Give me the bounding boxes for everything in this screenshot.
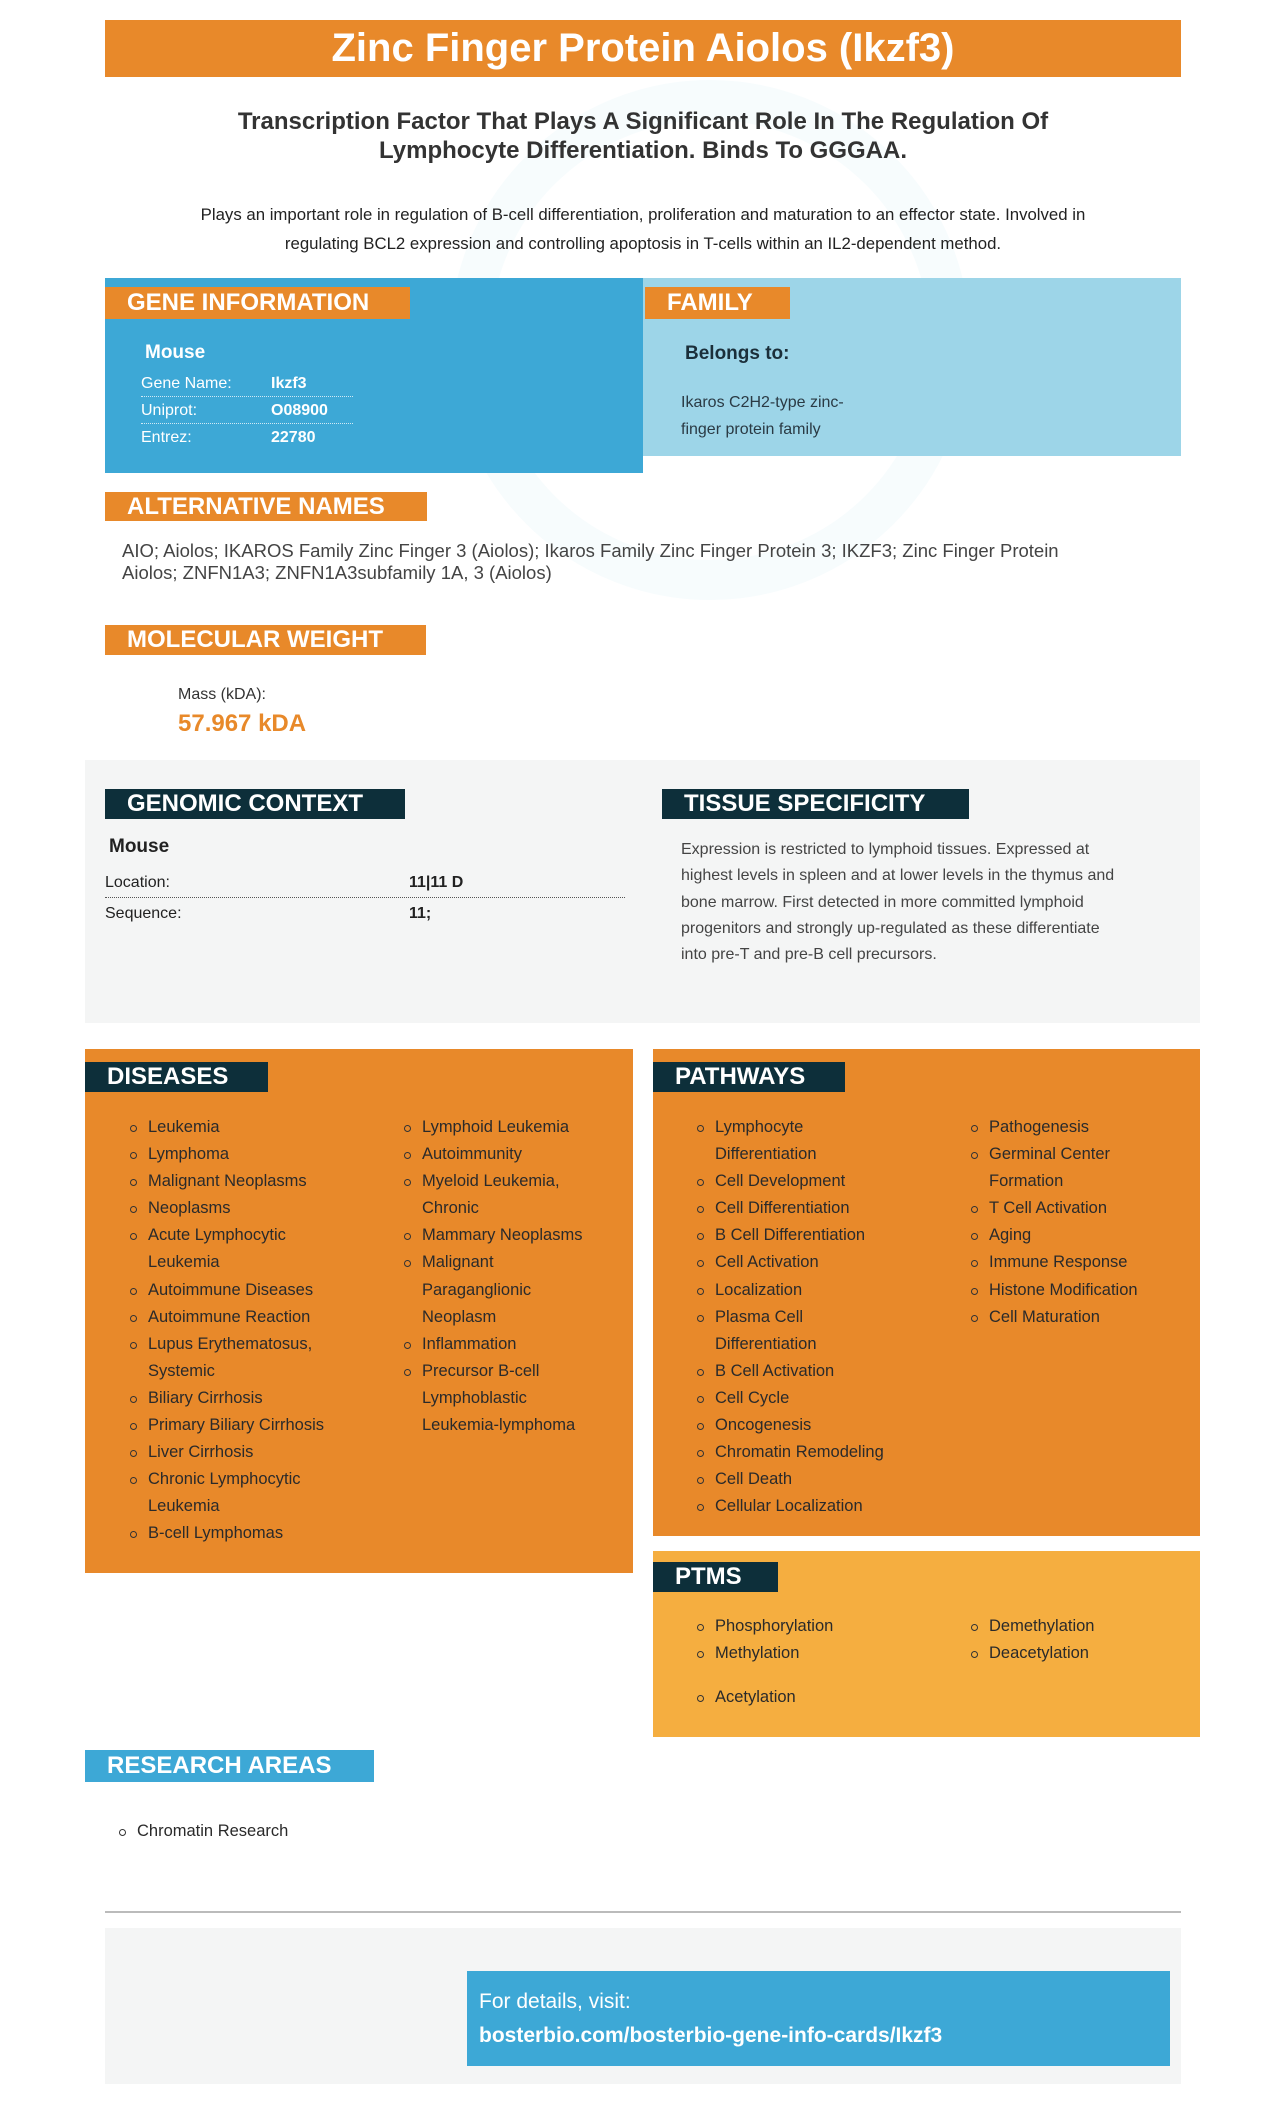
mass — [178, 686, 306, 737]
pathways list col 2 — [971, 1118, 1138, 1326]
genomic table: Mouse — [109, 836, 169, 857]
pathways list col 1: B Cell Differentiation — [715, 1226, 865, 1244]
genomic table: 11; — [409, 905, 431, 922]
panel: gene information — [105, 278, 643, 473]
heading: ptms — [653, 1562, 778, 1592]
pathways list col 1: Chromatin Remodeling — [715, 1443, 884, 1461]
pathways list col 2: Cell Maturation — [989, 1308, 1100, 1326]
pathways list col 1: Cell Differentiation — [715, 1199, 850, 1217]
ptms list col 2: Demethylation — [989, 1617, 1094, 1635]
title bar — [105, 20, 1181, 77]
panel: ptms — [653, 1551, 1200, 1737]
panel: genomic context & tissue — [85, 760, 1200, 1023]
tissue text: highest levels in spleen and at lower levels in the thymus and — [681, 867, 1114, 884]
diseases list col 2: Lymphoid Leukemia — [422, 1118, 569, 1136]
diseases list col 1: Leukemia — [148, 1497, 220, 1515]
diseases list col 2: Leukemia-lymphoma — [422, 1416, 575, 1434]
ptms list col 2 — [971, 1617, 1094, 1662]
heading: ptms: PTMS — [675, 1563, 742, 1590]
alternative names text: AIO; Aiolos; IKAROS Family Zinc Finger 3 (Aiolos); Ikaros Family Zinc Finger Protein 3; IKZF3; Zinc Finger Protein — [122, 540, 1059, 561]
pathways list col 1: Cell Development — [715, 1172, 845, 1190]
panel: pathways — [653, 1049, 1200, 1536]
gene info table: Mouse — [145, 342, 205, 363]
diseases list col 2: Autoimmunity — [422, 1145, 522, 1163]
pathways list col 1 — [697, 1118, 884, 1515]
pathways list col 1: Lymphocyte — [715, 1118, 803, 1136]
pathways list col 1: Cell Activation — [715, 1253, 819, 1271]
diseases list col 1: Leukemia — [148, 1253, 220, 1271]
heading: gene information — [105, 287, 410, 319]
heading: genomic context: GENOMIC CONTEXT — [127, 790, 363, 817]
description: Plays an important role in regulation of B-cell differentiation, proliferation and maturation to an effector state. Involved in — [201, 205, 1085, 224]
research areas list: Chromatin Research — [137, 1822, 288, 1840]
diseases list col 2: Chronic — [422, 1199, 479, 1217]
gene info table: 22780 — [271, 429, 316, 446]
heading: gene information: GENE INFORMATION — [127, 289, 369, 316]
pathways list col 2: Aging — [989, 1226, 1031, 1244]
ptms list col 1: Phosphorylation — [715, 1617, 833, 1635]
heading: research areas — [85, 1750, 374, 1782]
gene info table — [141, 342, 353, 446]
diseases list col 1 — [130, 1118, 324, 1542]
diseases list col 1: Systemic — [148, 1362, 215, 1380]
gene info table: Ikzf3 — [271, 375, 307, 392]
diseases list col 2: Precursor B-cell — [422, 1362, 539, 1380]
family text: finger protein family — [681, 421, 821, 438]
diseases list col 2: Neoplasm — [422, 1308, 496, 1326]
diseases list col 1: B-cell Lymphomas — [148, 1524, 283, 1542]
diseases list col 1: Biliary Cirrhosis — [148, 1389, 263, 1407]
diseases list col 1: Malignant Neoplasms — [148, 1172, 307, 1190]
family text: Ikaros C2H2-type zinc- — [681, 394, 844, 411]
genomic table: Sequence: — [105, 905, 182, 922]
watermark logo — [450, 80, 970, 600]
callout: details link: For details, visit: — [479, 1990, 631, 2013]
pathways list col 2: Histone Modification — [989, 1281, 1138, 1299]
panel: diseases — [85, 1049, 633, 1573]
pathways list col 2: Formation — [989, 1172, 1063, 1190]
description — [201, 205, 1085, 253]
diseases list col 1: Lupus Erythematosus, — [148, 1335, 312, 1353]
footer panel — [105, 1928, 1181, 2084]
tissue text: bone marrow. First detected in more committed lymphoid — [681, 894, 1084, 911]
heading: pathways — [653, 1062, 845, 1092]
gene info table: Gene Name: — [141, 375, 232, 392]
diseases list col 1: Liver Cirrhosis — [148, 1443, 253, 1461]
pathways list col 1: Localization — [715, 1281, 802, 1299]
pathways list col 1: B Cell Activation — [715, 1362, 834, 1380]
tissue text: into pre-T and pre-B cell precursors. — [681, 946, 937, 963]
ptms list col 1 — [697, 1617, 833, 1706]
diseases list col 2: Malignant — [422, 1253, 494, 1271]
pathways list col 2: Immune Response — [989, 1253, 1128, 1271]
diseases list col 2: Inflammation — [422, 1335, 516, 1353]
genomic table: 11|11 D — [409, 874, 463, 891]
pathways list col 1: Differentiation — [715, 1145, 817, 1163]
title bar: Zinc Finger Protein Aiolos (Ikzf3) — [331, 26, 954, 70]
tissue text — [681, 841, 1114, 963]
pathways list col 1: Cellular Localization — [715, 1497, 863, 1515]
gene info table: Uniprot: — [141, 402, 197, 419]
pathways list col 1: Oncogenesis — [715, 1416, 811, 1434]
heading: research areas: RESEARCH AREAS — [107, 1752, 331, 1779]
diseases list col 1: Autoimmune Reaction — [148, 1308, 310, 1326]
diseases list col 1: Primary Biliary Cirrhosis — [148, 1416, 324, 1434]
ptms list col 1: Acetylation — [715, 1688, 796, 1706]
callout: details link: bosterbio.com/bosterbio-gene-info-cards/Ikzf3 — [479, 2024, 942, 2047]
diseases list col 2: Paraganglionic — [422, 1281, 531, 1299]
pathways list col 1: Cell Cycle — [715, 1389, 789, 1407]
family text — [681, 394, 844, 438]
diseases list col 1: Chronic Lymphocytic — [148, 1470, 301, 1488]
diseases list col 2: Myeloid Leukemia, — [422, 1172, 560, 1190]
callout: details link — [467, 1971, 1170, 2066]
pathways list col 1: Plasma Cell — [715, 1308, 803, 1326]
gene info table: Entrez: — [141, 429, 192, 446]
pathways list col 2: T Cell Activation — [989, 1199, 1107, 1217]
mass: Mass (kDA): — [178, 686, 266, 703]
alternative names text: Aiolos; ZNFN1A3; ZNFN1A3subfamily 1A, 3 (Aiolos) — [122, 562, 552, 583]
diseases list col 1: Leukemia — [148, 1118, 220, 1136]
heading: diseases — [85, 1062, 268, 1092]
heading: diseases: DISEASES — [107, 1063, 228, 1090]
pathways list col 1: Cell Death — [715, 1470, 792, 1488]
pathways list col 1: Differentiation — [715, 1335, 817, 1353]
divider — [105, 1911, 1181, 1913]
pathways list col 2: Germinal Center — [989, 1145, 1110, 1163]
subtitle: Lymphocyte Differentiation. Binds To GGGAA. — [379, 137, 907, 164]
heading: molecular weight: MOLECULAR WEIGHT — [127, 626, 383, 653]
diseases list col 2 — [404, 1118, 582, 1434]
panel: family — [643, 278, 1181, 456]
diseases list col 1: Lymphoma — [148, 1145, 229, 1163]
heading: pathways: PATHWAYS — [675, 1063, 805, 1090]
heading: alternative names: ALTERNATIVE NAMES — [127, 493, 385, 520]
mass: 57.967 kDA — [178, 710, 306, 737]
ptms list col 1: Methylation — [715, 1644, 799, 1662]
diseases list col 2: Mammary Neoplasms — [422, 1226, 582, 1244]
diseases list col 1: Neoplasms — [148, 1199, 231, 1217]
ptms list col 2: Deacetylation — [989, 1644, 1089, 1662]
genomic table: Location: — [105, 874, 170, 891]
alternative names text — [122, 540, 1059, 583]
belongs to: Belongs to: — [685, 343, 790, 364]
diseases list col 2: Lymphoblastic — [422, 1389, 527, 1407]
diseases list col 1: Autoimmune Diseases — [148, 1281, 313, 1299]
pathways list col 2: Pathogenesis — [989, 1118, 1089, 1136]
diseases list col 1: Acute Lymphocytic — [148, 1226, 286, 1244]
heading: family: FAMILY — [667, 289, 753, 316]
subtitle — [238, 108, 1048, 164]
tissue text: Expression is restricted to lymphoid tissues. Expressed at — [681, 841, 1089, 858]
subtitle: Transcription Factor That Plays A Significant Role In The Regulation Of — [238, 108, 1048, 135]
heading: family — [645, 287, 790, 319]
description: regulating BCL2 expression and controlling apoptosis in T-cells within an IL2-dependent method. — [285, 234, 1001, 253]
gene info table: O08900 — [271, 402, 328, 419]
heading: tissue specificity: TISSUE SPECIFICITY — [684, 790, 925, 817]
genomic table — [105, 836, 625, 922]
tissue text: progenitors and strongly up-regulated as these differentiate — [681, 920, 1100, 937]
